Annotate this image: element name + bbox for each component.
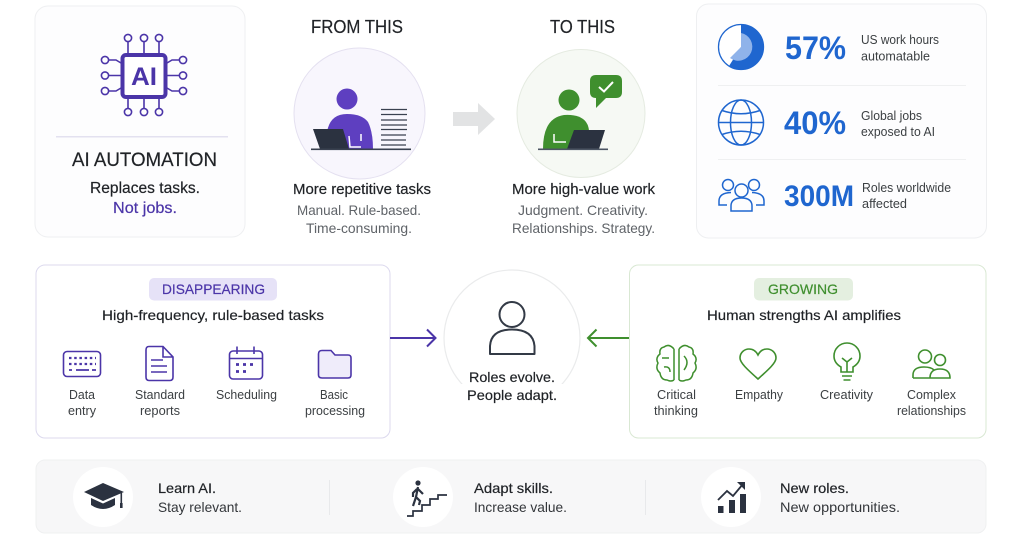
arrow: green to centre	[588, 330, 630, 346]
item: data entry: Data	[69, 388, 95, 402]
text: to description: Relationships. Strategy.	[512, 220, 655, 236]
item: creativity	[820, 343, 874, 402]
item: basic processing: processing	[305, 404, 365, 418]
text: not jobs: Not jobs.	[113, 200, 177, 217]
item: empathy: Empathy	[735, 388, 784, 402]
item: scheduling	[216, 346, 277, 402]
heading: AI automation: AI AUTOMATION	[72, 150, 217, 171]
item: data entry	[64, 352, 100, 418]
icon: people	[719, 180, 764, 211]
item: new roles: New opportunities.	[780, 499, 900, 515]
text: more high-value work: More high-value work	[512, 182, 656, 198]
text: people adapt: People adapt.	[467, 387, 557, 403]
text: more repetitive tasks: More repetitive tasks	[293, 182, 431, 198]
panel: bottom actions	[36, 460, 986, 533]
icon: growth chart	[718, 482, 746, 513]
item: critical thinking: Critical	[657, 388, 696, 402]
item: adapt skills	[393, 467, 567, 527]
text: from description: Time-consuming.	[306, 220, 412, 236]
item: basic processing	[305, 350, 365, 418]
item: complex relationships: relationships	[897, 404, 966, 418]
icon: pie chart	[718, 24, 764, 70]
item: new roles: New roles.	[780, 480, 849, 496]
item: data entry: entry	[68, 404, 97, 418]
stat: 57%: 57%	[785, 30, 846, 66]
stat: 300M: Roles worldwide	[862, 181, 951, 195]
icon: climbing stairs	[407, 480, 447, 516]
item: learn AI: Learn AI.	[158, 480, 216, 496]
item: empathy	[735, 349, 784, 402]
item: scheduling: Scheduling	[216, 388, 277, 402]
item: creativity: Creativity	[820, 388, 874, 402]
panel: from this	[293, 17, 431, 236]
badge: disappearing: DISAPPEARING	[162, 281, 265, 297]
stat: 57%	[785, 30, 939, 66]
item: critical thinking	[654, 345, 698, 418]
badge: growing: GROWING	[768, 281, 838, 297]
item: learn AI	[73, 467, 242, 527]
subheading: rule-based tasks: High-frequency, rule-based tasks	[102, 307, 324, 323]
text: from description	[297, 202, 421, 236]
icon: globe	[718, 100, 764, 145]
item: adapt skills: Increase value.	[474, 499, 567, 515]
item: complex relationships	[897, 350, 966, 418]
item: basic processing: Basic	[320, 388, 348, 402]
icon: AI chip	[101, 34, 187, 116]
stat: 300M	[784, 180, 951, 213]
stat: 300M: 300M	[784, 180, 854, 213]
stat: 40%: exposed to AI	[861, 125, 935, 139]
badge: growing	[754, 278, 853, 300]
text: roles evolve: Roles evolve.	[469, 369, 555, 385]
arrow: from to	[453, 103, 495, 135]
illustration: repetitive desk work	[294, 48, 425, 179]
icon: AI chip: AI	[131, 63, 157, 91]
heading: from this: FROM THIS	[311, 17, 403, 37]
panel: disappearing	[36, 265, 390, 438]
stat: 40%: Global jobs	[861, 109, 922, 123]
panel: statistics	[696, 4, 986, 238]
icon: person	[490, 302, 534, 354]
stat: 300M: affected	[862, 197, 907, 211]
text: to description	[512, 202, 655, 236]
panel: growing	[630, 265, 986, 438]
item: standard reports	[135, 346, 185, 418]
panel: centre roles	[444, 270, 580, 410]
illustration: high-value work	[517, 50, 645, 178]
heading: to this: TO THIS	[550, 17, 615, 37]
icon: graduation cap	[84, 483, 124, 509]
item: critical thinking: thinking	[654, 404, 698, 418]
item: adapt skills: Adapt skills.	[474, 480, 553, 496]
item: new roles	[701, 467, 900, 527]
badge: disappearing	[149, 278, 277, 300]
text: replaces tasks: Replaces tasks.	[90, 180, 200, 197]
stat: 57%: US work hours	[861, 33, 939, 47]
panel: to this	[512, 17, 656, 236]
stat: 40%	[784, 105, 935, 141]
text: to description: Judgment. Creativity.	[518, 202, 648, 218]
stat: 40%: 40%	[784, 105, 846, 141]
subheading: human strengths: Human strengths AI amplifies	[707, 307, 901, 323]
text: from description: Manual. Rule-based.	[297, 202, 421, 218]
item: standard reports: reports	[140, 404, 180, 418]
item: standard reports: Standard	[135, 388, 185, 402]
stat: 57%: automatable	[861, 50, 930, 64]
item: complex relationships: Complex	[907, 388, 957, 402]
item: learn AI: Stay relevant.	[158, 499, 242, 515]
arrow: purple to centre	[390, 330, 436, 346]
panel: AI automation	[35, 6, 245, 237]
